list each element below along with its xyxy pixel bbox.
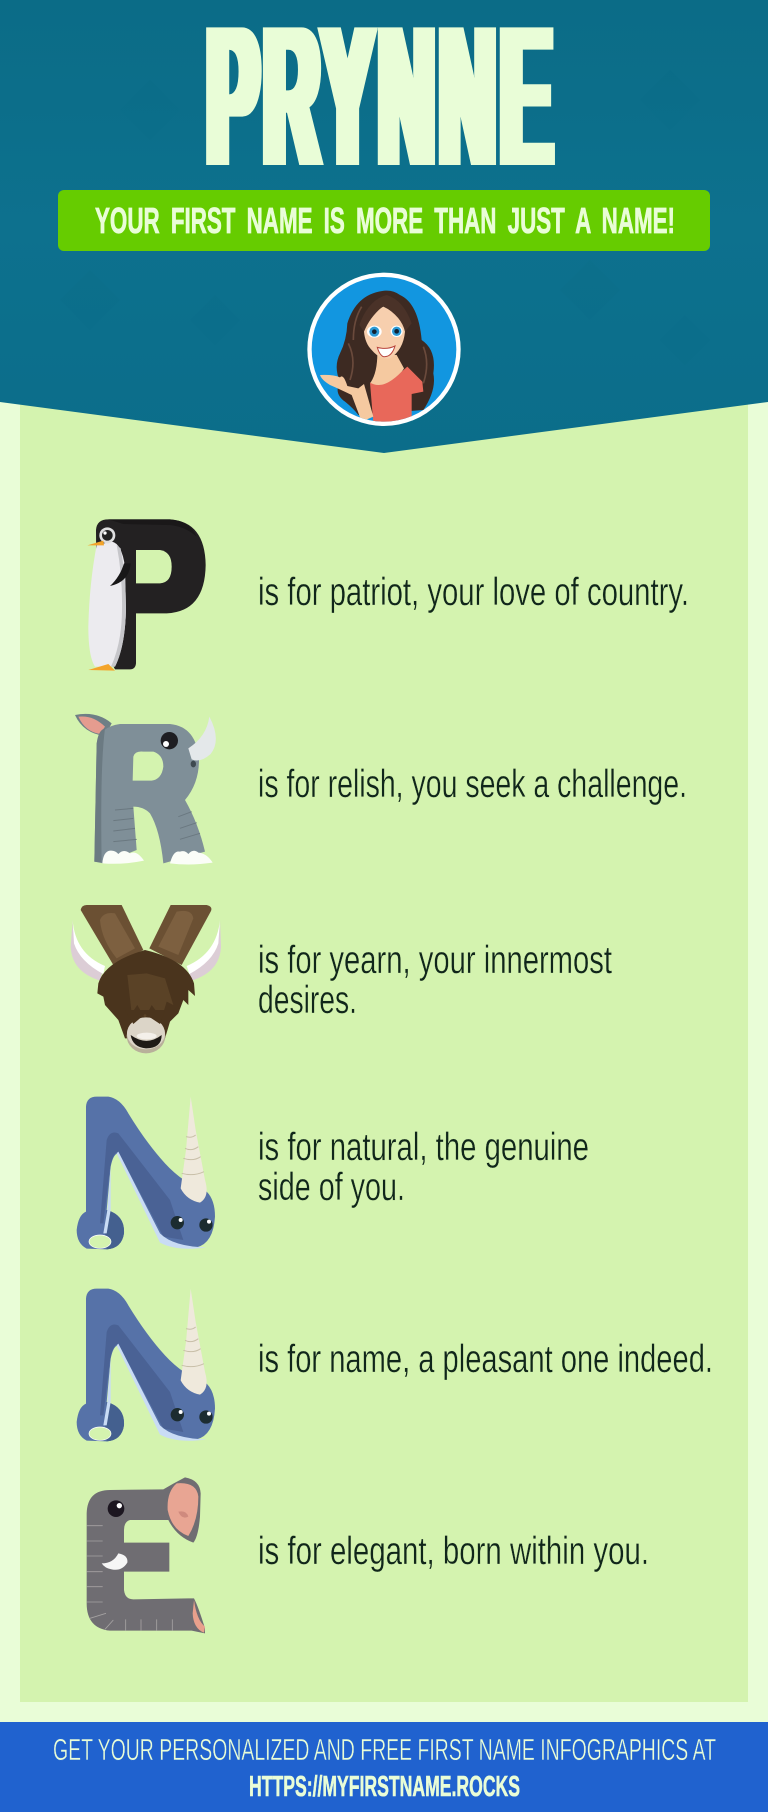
letter P row	[87, 519, 689, 671]
panel: letters	[20, 390, 748, 1702]
icon: penguin P	[87, 519, 206, 671]
icon: narwhal N second	[77, 1289, 215, 1441]
avatar	[307, 273, 461, 426]
letter Y row	[71, 905, 612, 1053]
footer	[0, 1722, 768, 1812]
letter R row	[75, 714, 687, 865]
icon: rhino R	[75, 714, 216, 865]
text: elegant: is for elegant, born within you.	[258, 1530, 649, 1573]
letter E row	[87, 1477, 649, 1633]
icon: narwhal N	[77, 1097, 215, 1249]
text: natural: side of you.	[258, 1166, 405, 1209]
letter N row two	[77, 1289, 713, 1441]
text: yearn	[258, 939, 612, 1022]
letter N row one	[77, 1097, 589, 1249]
icon: yak Y	[71, 905, 221, 1053]
icon: elephant E	[87, 1477, 205, 1633]
text: natural	[258, 1126, 589, 1209]
header band	[0, 0, 768, 453]
text: natural: is for natural, the genuine	[258, 1126, 589, 1169]
footer url: HTTPS://MYFIRSTNAME.ROCKS	[249, 1771, 520, 1803]
banner	[58, 190, 710, 251]
text: yearn: desires.	[258, 979, 357, 1022]
text: yearn: is for yearn, your innermost	[258, 939, 612, 982]
